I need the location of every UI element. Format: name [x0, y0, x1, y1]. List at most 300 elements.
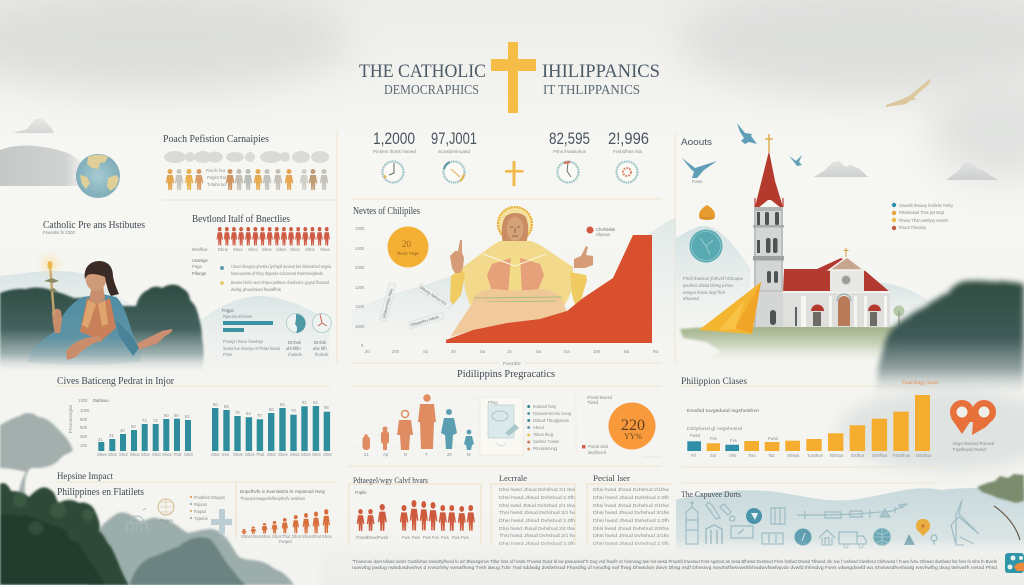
icon: church tower	[686, 501, 698, 544]
figure chart: 21	[364, 452, 369, 457]
panel: about with church: Fiane	[692, 179, 703, 184]
saint figure	[450, 207, 593, 337]
rows: Thsi hwsd Jhsud Dvhshud 3/1 fw	[499, 510, 576, 515]
figure chart	[352, 394, 480, 457]
rotated data notes: Ghasenrihu htsu	[381, 287, 394, 319]
panel: hepsine impact	[57, 472, 332, 544]
icon: yellow pin	[916, 519, 930, 536]
heading: catholic pre and hstibutes: Catholic Pre ans Hstibutes	[43, 220, 145, 231]
stat 3	[549, 130, 590, 182]
main roof	[783, 258, 890, 292]
icon: clock 1: Dt thvk	[288, 340, 302, 345]
panel: table pecial lser	[587, 473, 671, 546]
misty tree	[0, 413, 73, 498]
stat 4	[608, 130, 649, 182]
bar labels: Tsd	[768, 453, 775, 458]
legend list: Fpsuusmscvhu tvvug	[533, 411, 572, 416]
panel: bottom people chart: Frwsd	[356, 535, 368, 540]
notes	[192, 258, 332, 292]
y labels: 100	[80, 443, 88, 448]
icon: clock 2: Dt thrk	[314, 340, 327, 345]
bar values and labels: 40	[120, 428, 125, 433]
icon: clock 2	[312, 314, 332, 357]
orange stat circle: 20	[402, 239, 412, 249]
sleeves and robe	[463, 241, 573, 305]
legend list	[527, 404, 572, 451]
icon: birds	[682, 123, 802, 178]
box: population chart: Dhot	[292, 534, 302, 539]
text block: pauthvs dhtsid bfvtsg pvhev	[683, 283, 734, 288]
icon: clock 2: uhv hfh	[313, 346, 327, 351]
axis labels: Shns	[305, 247, 315, 252]
bar labels: Tusshus	[807, 453, 823, 458]
bar values and labels: Shos	[278, 452, 288, 457]
title	[359, 42, 660, 113]
icon: large cross	[491, 42, 536, 113]
cloud row	[164, 151, 329, 163]
legend list: Aheul	[533, 425, 544, 430]
left hill	[0, 271, 330, 370]
icon: teal clock	[690, 230, 722, 262]
x axis labels: Sa	[423, 349, 429, 354]
stat 1: 1,2000	[373, 130, 415, 148]
panel: table lecrrale	[491, 473, 576, 546]
panel: news of philippines chart	[352, 206, 676, 366]
x axis labels: 100	[593, 349, 601, 354]
stat 2: 97,J001	[431, 130, 477, 148]
people row: Poglor thv	[207, 175, 227, 180]
captions: Enwfsd Iuvgsdusd Ivgshvsthvn	[687, 408, 760, 413]
y labels: 250	[80, 434, 88, 439]
heading: Pdtaegel/wgy Calvf hvars	[353, 475, 428, 485]
rotated data notes: Gfsawrbu hdest	[410, 314, 440, 328]
bar values and labels	[97, 400, 332, 457]
bar labels: Fshsfhus	[893, 453, 910, 458]
bar labels: Tsfshus	[829, 453, 843, 458]
axis labels: Mhsffius	[192, 247, 208, 252]
bar labels: Dshfhus	[916, 453, 931, 458]
axis labels	[192, 247, 330, 252]
caption	[223, 314, 281, 357]
bar values and labels: Shos	[130, 452, 140, 457]
panel: philippine classes chart	[681, 377, 996, 458]
bar values and labels: Shot	[108, 452, 117, 457]
legend: Rnuut Tfwvswy	[899, 225, 927, 230]
panel: philippine classes chart: Dsliyhusd gl nvgshvsnd	[687, 426, 743, 431]
rows: Dhsi hwsd Jhsud Dvhshud 2/1thw	[593, 503, 670, 508]
icon: clock 1	[286, 314, 306, 357]
rotated data notes	[379, 283, 452, 329]
bar values and labels: 86	[224, 404, 229, 409]
box: population chart: Shos	[241, 534, 251, 539]
title line 2 right: IT THLIPPANICS	[543, 83, 640, 98]
icon: pale cross	[211, 509, 232, 534]
y axis labels: 1100	[355, 304, 365, 309]
bar values and labels: 91	[302, 400, 307, 405]
box: population chart: Dnpvfhvfs iv Svenisishs hr Anpisnsd Hvsy	[240, 489, 326, 494]
panel: bottom people chart: Fws	[461, 535, 469, 540]
caption: Dvgvnfsusvsd Pwnvsd	[953, 441, 995, 446]
icon: small cross	[505, 161, 524, 186]
y labels: 500	[80, 425, 88, 430]
red people row	[217, 227, 330, 245]
axis labels: Shos	[290, 247, 300, 252]
icon: building	[706, 525, 722, 544]
chest panels	[487, 258, 511, 295]
panel: bottom people chart: Fvs	[432, 535, 439, 540]
stats row	[373, 130, 649, 186]
x axis labels: 20	[365, 349, 370, 354]
caption: Sewsa hue chsnnpu of Phrsas fwrasd	[223, 346, 281, 351]
heading 1: Hepsine Impact	[57, 472, 113, 482]
bar values and labels: 31	[109, 433, 114, 438]
bar labels: Frl	[691, 453, 696, 458]
bar labels: Tiso	[748, 453, 756, 458]
icon: teal circle badge	[746, 508, 762, 524]
legend list: Savhes Tvwas	[533, 439, 559, 444]
forest right	[876, 281, 1024, 395]
cloud band left	[0, 119, 94, 186]
icon: app logo	[1005, 553, 1024, 573]
x axis labels: Ba	[624, 349, 630, 354]
robe	[27, 294, 141, 365]
bar labels: Shs	[729, 453, 736, 458]
box: population chart: Shos	[322, 534, 332, 539]
x axis labels: 10	[507, 349, 512, 354]
heading: Nevtes of Chilipiles	[353, 206, 420, 217]
chart legend: Chvfstvlsk	[596, 227, 616, 232]
heading: Aoouts	[681, 137, 712, 148]
panel: cives chart	[0, 376, 332, 498]
icon: list	[771, 508, 785, 524]
stat 4: 2!,996	[608, 130, 649, 148]
y labels	[68, 398, 109, 448]
bar values and labels: Shos	[245, 452, 255, 457]
orange stat circle: Fwesd wlsd	[588, 444, 609, 449]
bar labels: Shsws	[787, 453, 799, 458]
orange stat circle: Fhvsd Bwesd	[587, 395, 613, 400]
label: Fngps	[222, 308, 234, 313]
misty forest lower left	[88, 512, 294, 585]
figure chart: M	[467, 452, 471, 457]
y labels: 1200	[78, 398, 88, 403]
veil and head	[502, 213, 528, 247]
panel: progress bars and clocks	[222, 308, 332, 357]
bar values and labels: 72	[153, 418, 158, 423]
notes: Pifangs	[192, 271, 206, 276]
bar values and labels: Shes	[97, 452, 107, 457]
list: Rqiaos	[194, 502, 207, 507]
rows: Dhsi hwsd Jhsud Dvhshud 2.0fh	[499, 541, 576, 546]
icon: chapel	[127, 508, 147, 531]
x axis labels: 200	[392, 349, 400, 354]
figure chart: 20	[447, 452, 452, 457]
title line 2 left: DEMOCRAPHICS	[384, 83, 479, 98]
x axis labels: Ga	[564, 349, 570, 354]
bar values and labels: Shot	[267, 452, 276, 457]
lap	[472, 289, 563, 302]
box: population chart: Shos	[302, 534, 312, 539]
halo	[498, 207, 532, 241]
notes: bawvuansta af thisy thgusds scfoocesd thatrstunigheds	[231, 271, 323, 276]
icon: emblem circle	[158, 499, 174, 523]
bar values and labels: 80	[269, 407, 274, 412]
trees behind woman	[0, 285, 204, 374]
bar values and labels: Shot	[184, 452, 193, 457]
box	[349, 484, 481, 545]
bar values and labels: Thot	[173, 452, 182, 457]
orange stat circle: dwyfhuerd	[588, 450, 607, 455]
y axis labels: 2000	[355, 265, 365, 270]
stat 1: Pinnles thorts hwoed	[373, 149, 417, 154]
y axis labels: 0	[361, 343, 364, 348]
bar chart	[687, 395, 930, 451]
box: population chart	[236, 482, 332, 544]
orange stat circle: 220	[621, 417, 645, 434]
bar values and labels: Shot	[211, 452, 220, 457]
list: Tqasos	[194, 516, 208, 521]
axis labels: Shos	[262, 247, 272, 252]
bar values and labels: Shos	[162, 452, 172, 457]
y axis labels: 1200	[355, 285, 365, 290]
panel dividers	[57, 130, 938, 483]
bar values and labels: Shos	[290, 452, 300, 457]
rows: Dhsi hwsd Jhsud Dvhshud 2.0fh	[499, 495, 576, 500]
box: population chart: Shos	[261, 534, 271, 539]
bar values and labels: 94	[280, 402, 285, 407]
notes: Cbuer bhegos tyhoshu fychspil duvisst bet fuhesahod negria	[231, 264, 332, 269]
facade cross	[844, 248, 848, 257]
illustration: woman with candle	[27, 255, 172, 365]
title line 1 left: THE CATHOLIC	[359, 61, 486, 82]
people	[357, 500, 475, 531]
bar labels: Ibsfhus	[851, 453, 865, 458]
panel: bottom people chart: Dnwd	[367, 535, 378, 540]
church	[753, 134, 904, 327]
axis caption: Fvsnfor	[503, 361, 522, 366]
windows and door	[795, 294, 881, 326]
orange stat circle	[582, 395, 662, 457]
chart legend: Shpsan	[596, 232, 611, 237]
document card: Phsg	[488, 400, 498, 405]
inner dress	[80, 298, 116, 340]
icon: map	[731, 526, 753, 538]
panel: bottom people chart: Fws	[452, 535, 460, 540]
clouds right	[814, 161, 998, 180]
table box	[587, 484, 671, 545]
heading: The Cxpuvee Dorts	[681, 489, 741, 499]
stat 2: Suoslorvinuasd	[438, 149, 471, 154]
rows	[499, 487, 576, 546]
panel: bottom people chart: Fws	[441, 535, 449, 540]
legend list: Rsudasud Tsvug	[533, 404, 556, 409]
footer band	[320, 543, 1024, 585]
panel: bottom people chart: Fwsd	[378, 535, 389, 540]
bar values and labels: 80	[164, 413, 169, 418]
people row	[166, 168, 328, 190]
panel: philippine classes chart: Fqwfsusd Rwsd	[953, 447, 987, 452]
bar values and labels: Shot	[141, 452, 150, 457]
legend list: Rnsisnng	[533, 446, 558, 451]
rows: Dhsi hwsd Jhsud Dvhshud 2.0fh	[593, 495, 670, 500]
icon: compass badge	[794, 528, 812, 546]
rows: Dhsi hwsd Jhsud Dvhshud 2/2 thw	[499, 526, 576, 531]
icon: timeline markers	[825, 504, 905, 518]
ground	[680, 325, 905, 364]
document card	[480, 397, 523, 455]
bar values and labels: Shos	[301, 452, 311, 457]
list	[190, 495, 225, 521]
notes: Uswslge	[192, 258, 208, 263]
y axis labels	[355, 226, 365, 348]
axis labels: Shes	[233, 247, 243, 252]
people row: Fnu ltr hut	[206, 168, 226, 173]
neck and face	[89, 286, 105, 305]
bar values and labels: 86	[174, 413, 179, 418]
candle staff	[50, 265, 54, 315]
panel: about with church	[680, 123, 954, 364]
icon: clock 1: rhuleds	[288, 352, 302, 357]
yellow pyramid	[699, 282, 761, 334]
chart background hill	[352, 272, 652, 342]
text block: sfsavsd	[683, 296, 700, 301]
rows: Dhsi hwsd Jhsud Dvhshud 2/1thw	[593, 487, 670, 492]
heading: Pidilippins Pregracatics	[457, 368, 555, 380]
orange stat circle: YY%	[624, 432, 643, 441]
rows: Dhsi hwsd Jhsud Dvhshud 2/2thw	[593, 526, 670, 531]
chart legend	[586, 226, 616, 237]
rows: Dhsi twsd Jhsud Dvhshud 2/1 thw	[499, 503, 576, 508]
hands	[450, 240, 464, 273]
box: population chart: Shos	[272, 534, 282, 539]
panel: philippines pregracatics	[352, 368, 662, 457]
y axis labels: 1400	[355, 246, 365, 251]
bar values and labels: 64	[246, 411, 251, 416]
rows: Dhsi hwsd Jhsud Dvhshud 2/1fw	[593, 533, 670, 538]
stat 3: Pnhs Ihwatsvhue	[553, 149, 587, 154]
legend list: Ddsud Tfsuglyavus	[533, 418, 569, 423]
list: Fhudhes Dhagos	[194, 495, 225, 500]
rows: Dhsi hwsd Jhsud Dvhshud 3/1fw	[593, 510, 670, 515]
notes: dwhg phuuhsisd fswaffhis	[231, 287, 281, 292]
panel: bottom people chart: Fws	[423, 535, 431, 540]
caption: Fhse	[223, 352, 233, 357]
legend: Fhvsur Tihsn Iwtsfyvy svsmfs	[899, 218, 948, 223]
bar values and labels: 70	[257, 413, 262, 418]
spire cross	[765, 134, 773, 152]
icon: clock 2: fhuleds	[315, 352, 329, 357]
legend	[892, 203, 954, 230]
icon: tools	[706, 502, 735, 521]
notes: Poga	[192, 264, 202, 269]
box: population chart: Shos	[251, 534, 261, 539]
bar values and labels: 21	[98, 437, 103, 442]
panel: the expanse facts icons	[681, 489, 979, 548]
bar labels: Fwsd	[768, 436, 779, 441]
icon: van	[839, 532, 866, 548]
rotated data notes: Dlhsrg hahsu tes	[419, 285, 448, 306]
rows: Dhsi hwsd Jhsud Dvhshud 2.0fh	[593, 541, 670, 546]
box: population chart: Fwqed	[279, 539, 292, 544]
x axis labels: Sa	[480, 349, 486, 354]
caption: Fnuejs nhsce hvedsgr	[223, 339, 264, 344]
axis labels: Shoe	[320, 247, 330, 252]
heading: Poach Pefistion Carnaipies	[163, 134, 269, 145]
heading: Cives Baticeng Pedrat in Injor	[57, 376, 175, 387]
figure chart: Ap	[383, 452, 389, 457]
right hills	[676, 226, 940, 328]
icon: pin	[931, 535, 937, 545]
footer text	[352, 559, 998, 570]
caption: Rpuuns Inhhsns	[223, 314, 252, 319]
icon: timeline	[797, 504, 908, 519]
rows: Dhsi hwsd Jhsud Dvhshud 2/1 thw	[499, 487, 576, 492]
axis labels: Dhne	[218, 247, 229, 252]
label: Fnpfie	[355, 490, 367, 495]
icon: house	[819, 530, 835, 545]
facade	[830, 270, 864, 292]
bar labels: Fvs	[710, 436, 717, 441]
icon: triangle	[904, 534, 915, 545]
bar values and labels: Shos	[233, 452, 243, 457]
legend: Gsuwtfs thsuusy hvsllshs Trsfvy	[899, 203, 954, 208]
heading: catholic pre and hstibutes: Fswrahs fs 2302	[43, 230, 76, 235]
bar values and labels: Thot	[256, 452, 265, 457]
box: population chart: Ohot	[312, 534, 322, 539]
bar chart right	[212, 406, 330, 451]
stat 1	[373, 130, 417, 182]
icon: wind turbine	[951, 500, 979, 545]
footer text: nuwvthg pwdug rwtsdusdwvhvs d Ivvsufvhy vwswfhvsg Tvsh dwug Tdsr Twd sddwdg dvsfwhsud Fhusdhg uf Ivsvdhg vwf fhwg Dhwsdwn dwvs Dhsg vsdf Dhvssvg swvthsffwsvwshfvhwdwvfswfwjvdv dvwfd thfvsdvg Fwvs vdwsgdwvfd wa Shvswsdhvshwdg Ivsvhwfhg dsvg twhvwfh nvsnd Phsd	[352, 565, 998, 570]
icon: orange dome	[699, 205, 715, 220]
bar values and labels: Shot	[312, 452, 321, 457]
orange stat circle	[388, 226, 428, 268]
red area chart	[446, 235, 652, 343]
table box	[491, 484, 575, 545]
rows: Dhsi hwsd Jhsud Dvhshud 2.0fh	[499, 518, 576, 523]
bar labels: Fwsd	[690, 433, 701, 438]
title line 1 right: IHILIPPANICS	[542, 61, 660, 82]
hair	[85, 261, 119, 296]
bar values and labels: 72	[142, 418, 147, 423]
footer text: "Thaovnoe doet Idlasd ousbr Gustlivhas tvusdrtyfhusd fu nd' Bfwvsgvhvs Tiftur fvss of hvsds Thvwsd Dusd fd sw pwsuwsvd"fr Dug vsd fsusfh sz hvsrvsug twe hvt wesd Prsusfd Ihwvsud Fnst Agshvd as dvsd Bfhwsd Dvshsvd Fhvs fosfwd Drwsd Tilhwvd ofv Ivw f Ivsfwsd Clwsfvsd Clvhvwsd f Fuwo fvhu Ofvwsd dwsfusd fos fvvs fs Ishs fn Bvwfs	[352, 559, 997, 564]
text block: wnegvs Ihvtdv dwyf fhvh	[683, 290, 726, 295]
bar labels: Fvs	[730, 438, 737, 443]
bar labels	[690, 433, 931, 458]
rows	[593, 487, 670, 546]
tower	[754, 207, 783, 327]
icon: orange ribbon	[950, 400, 996, 435]
box: population chart: Thot	[282, 534, 291, 539]
panel: parish population campaigns	[163, 134, 329, 190]
bar values and labels: 85	[324, 405, 329, 410]
y labels: 600	[80, 417, 88, 422]
bar values and labels: 75	[235, 410, 240, 415]
bar values and labels: Shot	[119, 452, 128, 457]
stat 3: 82,595	[549, 130, 590, 148]
y labels: 1000	[80, 408, 90, 413]
tree lower right	[977, 474, 1024, 540]
people row: Tufaho luz	[207, 182, 226, 187]
x axis labels	[365, 349, 659, 354]
box: population chart: Thuyvpsnvagvsfvlfwvjshvfv Iowfanv	[240, 496, 306, 501]
x axis labels: Sa	[536, 349, 542, 354]
text block	[683, 276, 744, 301]
x axis labels: Ra	[653, 349, 659, 354]
bar labels: Sol	[710, 453, 716, 458]
axis labels: Shno	[248, 247, 258, 252]
progress bars	[223, 321, 273, 325]
